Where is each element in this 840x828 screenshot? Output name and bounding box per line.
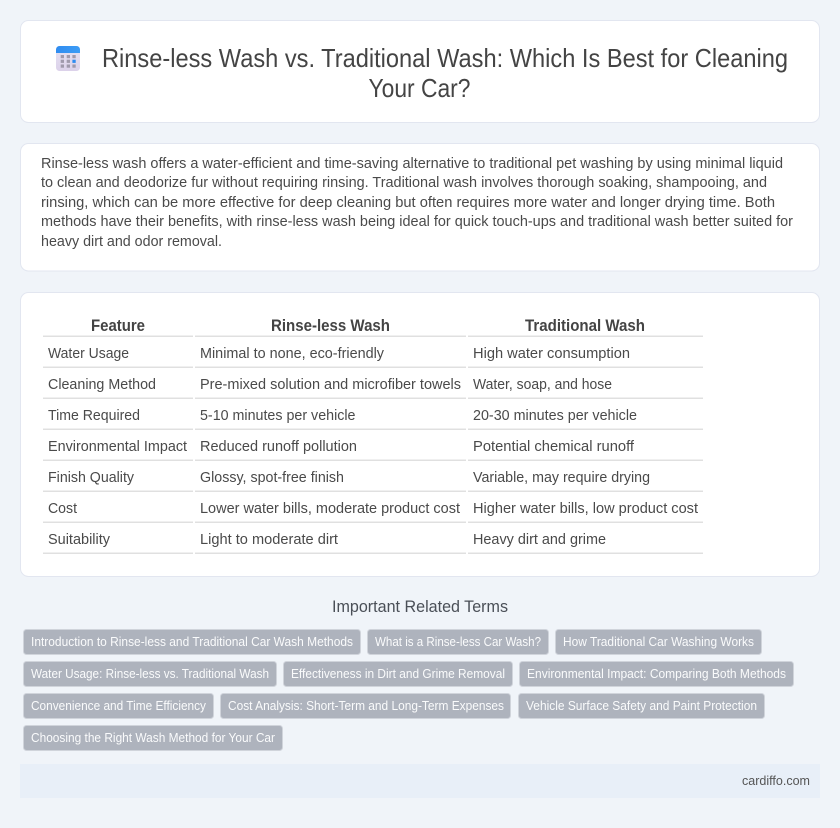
text block: description: Rinse-less wash offers a water-efficient and time-saving alternative to traditional pet washing by using minimal liquid <box>41 156 783 172</box>
tag: convenience <box>24 694 214 718</box>
table row: cost: Higher water bills, low product cost <box>473 501 698 517</box>
tag: introduction: Introduction to Rinse-less and Traditional Car Wash Methods <box>31 635 353 649</box>
tag: environmental impact: Environmental Impact: Comparing Both Methods <box>527 667 786 681</box>
table row: environmental impact: Reduced runoff pollution <box>200 439 357 455</box>
table row: cleaning method: Pre-mixed solution and microfiber towels <box>200 377 461 393</box>
table header <box>43 317 703 337</box>
tag: water usage <box>24 662 276 686</box>
footer: cardiffo.com <box>742 773 810 788</box>
tag: water usage: Water Usage: Rinse-less vs. Traditional Wash <box>31 667 269 681</box>
text block: description: rinsing, which can be more effective for deep cleaning but often requires more water and longer drying time. Both <box>41 195 775 211</box>
heading: related terms: Important Related Terms <box>332 598 508 616</box>
tag: surface safety <box>518 694 764 718</box>
table row: environmental impact: Potential chemical runoff <box>473 439 635 455</box>
panel: title card <box>20 20 820 122</box>
tag: choosing <box>24 726 282 750</box>
footer <box>20 764 820 798</box>
table row: suitability <box>43 532 703 554</box>
table row: suitability: Light to moderate dirt <box>200 532 338 548</box>
table row: suitability: Suitability <box>48 532 111 548</box>
tag: convenience: Convenience and Time Efficiency <box>31 699 207 713</box>
tag: cost analysis: Cost Analysis: Short-Term and Long-Term Expenses <box>228 699 504 713</box>
table row: cleaning method: Water, soap, and hose <box>473 377 612 393</box>
table row: finish quality: Glossy, spot-free finish <box>200 470 344 486</box>
table header: Traditional Wash <box>525 317 645 335</box>
table row: water usage: High water consumption <box>473 346 630 362</box>
panel: description card <box>20 144 820 271</box>
title <box>102 43 788 103</box>
tag: traditional washing <box>556 630 762 654</box>
table row: time required <box>43 408 703 430</box>
text block: description: methods have their benefits, with rinse-less wash being ideal for quick touch-ups and traditional wash better suited for <box>41 214 793 230</box>
tag: cost analysis <box>220 694 510 718</box>
table row: finish quality: Variable, may require drying <box>473 470 650 486</box>
icon: calendar grid <box>56 46 80 71</box>
tag: what is rinse-less: What is a Rinse-less Car Wash? <box>375 635 541 649</box>
panel: comparison table <box>20 292 820 576</box>
table row: water usage: Minimal to none, eco-friendly <box>200 346 385 362</box>
tag: effectiveness: Effectiveness in Dirt and Grime Removal <box>291 667 505 681</box>
tag: choosing: Choosing the Right Wash Method for Your Car <box>31 731 275 745</box>
table row: cost: Cost <box>48 501 77 517</box>
tag: introduction <box>24 630 360 654</box>
text block: description: to clean and deodorize fur without requiring rinsing. Traditional wash involves thorough soaking, shampooing, and <box>41 175 767 191</box>
table row: cleaning method: Cleaning Method <box>48 377 156 393</box>
text block: description: heavy dirt and odor removal. <box>41 234 222 250</box>
table row: cleaning method <box>43 377 703 399</box>
text block: description <box>41 156 793 250</box>
table header: Feature <box>91 317 145 335</box>
table row: cost: Lower water bills, moderate product cost <box>200 501 460 517</box>
table row: cost <box>43 501 703 523</box>
table row: water usage <box>43 346 703 368</box>
title: Rinse-less Wash vs. Traditional Wash: Which Is Best for Cleaning <box>102 43 788 73</box>
title: Your Car? <box>368 73 470 103</box>
tag: effectiveness <box>284 662 512 686</box>
table row: time required: Time Required <box>48 408 140 424</box>
tag: environmental impact <box>520 662 794 686</box>
table row: water usage: Water Usage <box>48 346 129 362</box>
panel: related term tags <box>24 630 794 750</box>
table row: suitability: Heavy dirt and grime <box>473 532 606 548</box>
table row: finish quality <box>43 470 703 492</box>
tag: what is rinse-less <box>368 630 548 654</box>
table row: environmental impact: Environmental Impact <box>48 439 187 455</box>
table row: finish quality: Finish Quality <box>48 470 135 486</box>
table row: environmental impact <box>43 439 703 461</box>
table row: time required: 20-30 minutes per vehicle <box>473 408 637 424</box>
table row: time required: 5-10 minutes per vehicle <box>200 408 356 424</box>
tag: traditional washing: How Traditional Car Washing Works <box>563 635 754 649</box>
tag: surface safety: Vehicle Surface Safety and Paint Protection <box>526 699 757 713</box>
table header: Rinse-less Wash <box>271 317 390 335</box>
